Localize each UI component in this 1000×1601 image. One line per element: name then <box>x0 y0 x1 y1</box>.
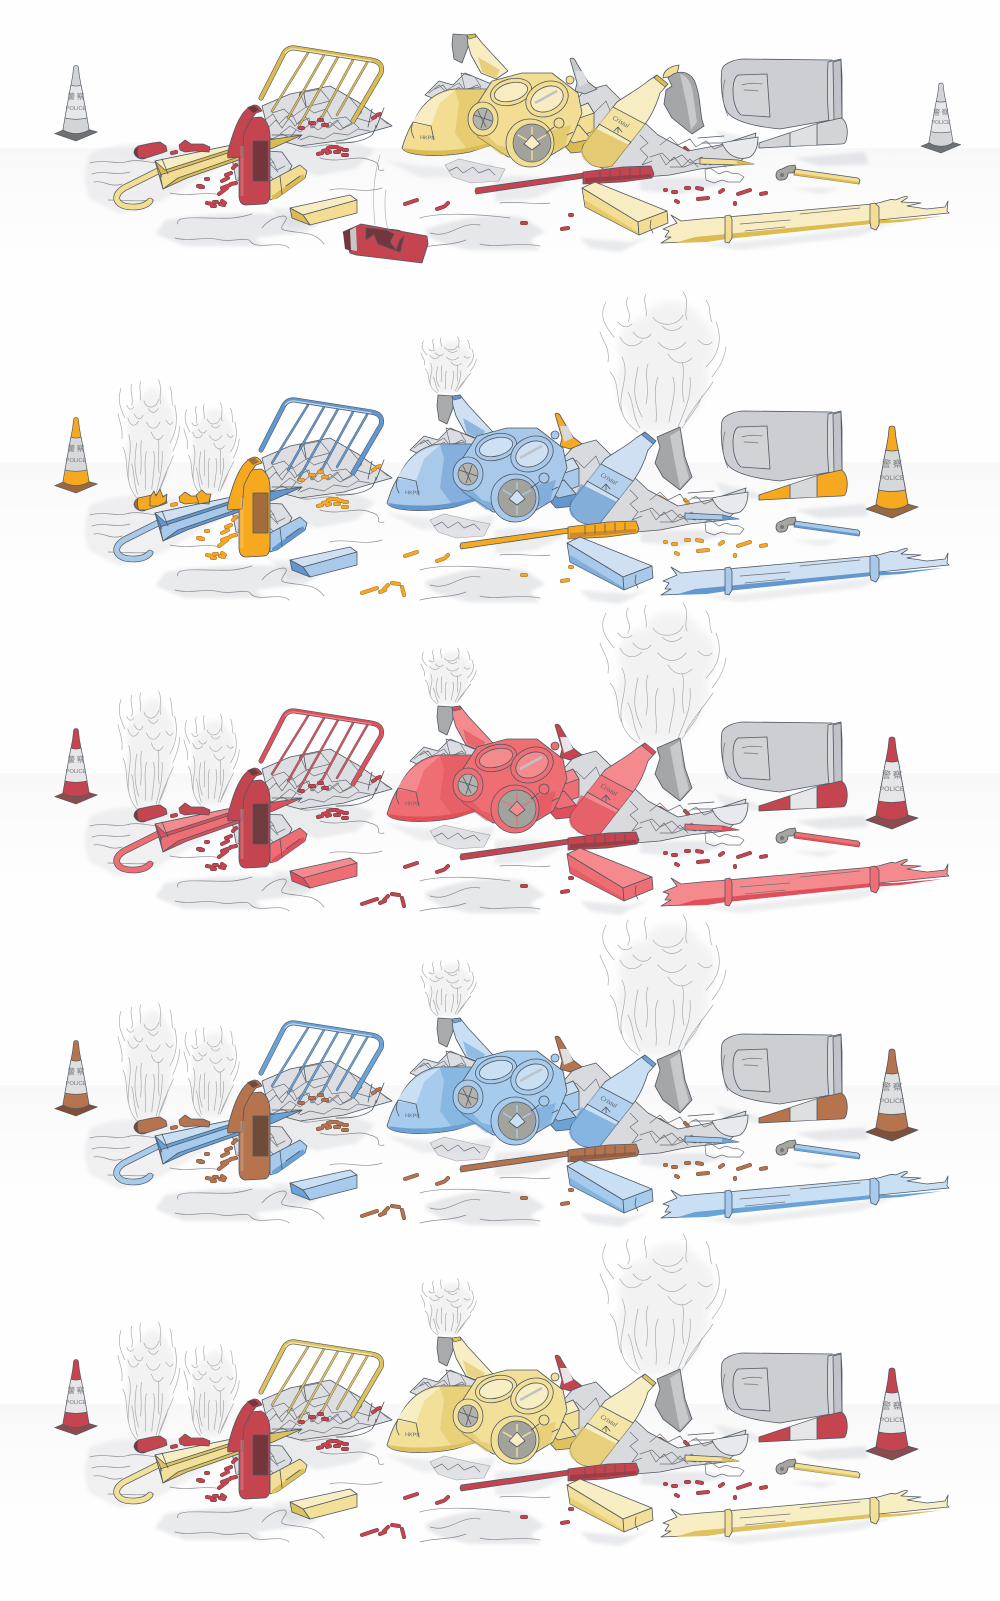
glass bottle <box>569 1374 656 1466</box>
broken stick <box>661 548 949 595</box>
gas canister <box>270 828 307 863</box>
hammer <box>776 165 860 184</box>
wheelie bin <box>721 722 842 792</box>
pen tool <box>685 824 740 831</box>
burning sticks <box>134 492 210 511</box>
pellets <box>172 466 766 595</box>
bottle rag <box>655 1369 692 1432</box>
helmet <box>402 89 492 156</box>
gas mask <box>453 739 567 833</box>
flames <box>150 489 211 506</box>
small bottle <box>437 395 493 440</box>
glass bottle <box>581 75 668 167</box>
fire extinguisher <box>228 768 270 868</box>
debris piles <box>232 86 392 184</box>
smoke plume small <box>421 337 476 393</box>
helmet <box>387 755 477 822</box>
pen tool <box>685 513 740 520</box>
broken stick <box>661 1171 949 1218</box>
floor tone <box>0 773 1000 893</box>
brick blocks <box>540 1081 579 1131</box>
pellets <box>172 114 766 243</box>
floor tone <box>0 1404 1000 1524</box>
pellets <box>172 1408 766 1537</box>
smoke plume second <box>184 1026 239 1117</box>
floor tone <box>0 462 1000 582</box>
fire extinguisher <box>228 1399 270 1499</box>
fence barrier <box>261 711 382 791</box>
debris piles <box>232 1061 392 1159</box>
panel: scene 3 red <box>0 603 1000 915</box>
broken stick <box>661 196 949 243</box>
smoke plume big <box>600 1234 726 1374</box>
bottle rag <box>655 1050 692 1113</box>
helmet <box>387 1067 477 1134</box>
bottle rag <box>655 427 692 490</box>
debris over helmet <box>410 1370 518 1480</box>
brick blocks <box>555 103 594 153</box>
fire extinguisher <box>228 105 270 205</box>
fallen cone <box>759 781 847 811</box>
brick right <box>567 537 653 590</box>
smoke plume second <box>184 714 239 805</box>
small cone grey <box>570 58 597 94</box>
left cone <box>55 729 97 804</box>
brick left <box>290 1170 357 1200</box>
crumbs <box>705 1144 744 1158</box>
smoke plume left <box>118 1003 180 1121</box>
pen tool <box>700 158 755 165</box>
panel: scene 5 yellow and red <box>0 1234 1000 1546</box>
fallen cone grey <box>759 118 847 148</box>
helmet <box>387 1386 477 1453</box>
screwdriver <box>460 832 639 860</box>
central debris <box>560 1063 748 1157</box>
floor tone <box>0 148 1000 268</box>
left cone <box>55 1041 97 1116</box>
debris over helmet <box>410 739 518 849</box>
panel: scene 4 blue and brown <box>0 915 1000 1227</box>
debris over helmet <box>410 428 518 538</box>
burning sticks <box>134 1115 210 1134</box>
central debris <box>570 85 758 179</box>
smoke plume big <box>600 603 726 743</box>
wheelie bin <box>721 1034 842 1104</box>
small bottle <box>437 706 493 751</box>
smoke plume small <box>421 960 476 1016</box>
brick blocks <box>540 1400 579 1450</box>
crumbs <box>705 520 744 535</box>
gas canister <box>270 165 307 200</box>
floor puddles and scribbles <box>85 1422 900 1546</box>
brick right <box>582 182 668 235</box>
umbrella <box>117 1110 302 1182</box>
central debris <box>560 751 748 845</box>
debris piles <box>232 749 392 847</box>
brick left <box>290 1489 357 1519</box>
fire extinguisher <box>228 1080 270 1180</box>
bottle rag long <box>663 65 704 134</box>
small cone <box>555 413 582 449</box>
floor puddles and scribbles <box>85 1103 900 1227</box>
small cone <box>555 724 582 760</box>
pen tool <box>685 1455 740 1462</box>
broken stick <box>661 859 949 906</box>
hammer <box>776 828 860 847</box>
floor puddles and scribbles <box>85 791 900 915</box>
dropped canister <box>343 155 428 263</box>
burning sticks <box>134 1434 210 1453</box>
left cone <box>55 1360 97 1435</box>
fire extinguisher <box>228 457 270 557</box>
bottle rag <box>655 738 692 801</box>
gas mask <box>453 1370 567 1464</box>
crumbs <box>705 168 744 183</box>
gas mask <box>468 73 582 167</box>
pellets <box>172 1089 766 1218</box>
brick blocks <box>540 458 579 508</box>
hammer <box>776 1459 860 1478</box>
smoke plume big <box>600 915 726 1055</box>
glass bottle <box>569 743 656 835</box>
fallen cone <box>759 1412 847 1442</box>
screwdriver <box>460 1144 639 1172</box>
gas canister <box>270 1459 307 1494</box>
wheelie bin <box>721 411 842 481</box>
wheelie bin <box>721 1353 842 1423</box>
debris over helmet <box>410 1051 518 1161</box>
right cone grey <box>921 83 961 153</box>
smoke plume left <box>118 691 180 809</box>
fallen cone <box>759 1093 847 1123</box>
small bottle <box>437 1337 493 1382</box>
screwdriver <box>460 521 639 549</box>
crumbs <box>705 832 744 846</box>
small cone <box>555 1036 582 1072</box>
small cone <box>555 1355 582 1391</box>
gas canister <box>270 1140 307 1175</box>
fence barrier <box>261 1023 382 1103</box>
pellets <box>172 777 766 906</box>
screwdriver <box>460 1463 639 1491</box>
smoke plume small <box>421 1279 476 1335</box>
floor puddles and scribbles <box>85 480 900 604</box>
panel: scene 2 blue and orange <box>0 292 1000 604</box>
burning sticks <box>134 803 210 822</box>
fence barrier <box>261 1342 382 1422</box>
spent sticks <box>134 140 210 159</box>
central debris <box>560 1382 748 1476</box>
umbrella <box>117 487 302 559</box>
brick right <box>567 1160 653 1213</box>
gas canister <box>270 517 307 552</box>
floor puddles and scribbles <box>85 128 900 252</box>
gas mask <box>453 428 567 522</box>
crumbs <box>705 1462 744 1477</box>
brick right <box>567 848 653 901</box>
smoke plume second <box>184 1345 239 1436</box>
right cone <box>866 1049 918 1141</box>
hammer <box>776 517 860 536</box>
left cone grey <box>55 66 97 141</box>
helmet <box>387 444 477 511</box>
umbrella <box>117 1429 302 1501</box>
smoke plume small <box>421 648 476 704</box>
smoke plume big <box>600 292 726 432</box>
small bottle <box>437 1018 493 1063</box>
smoke plume left <box>118 1322 180 1440</box>
debris piles <box>232 1380 392 1478</box>
glass bottle <box>569 432 656 524</box>
brick left <box>290 195 357 225</box>
broken stick <box>661 1490 949 1537</box>
right cone <box>866 426 918 518</box>
screwdriver <box>475 166 654 194</box>
smoke plume left <box>118 380 180 498</box>
debris over helmet <box>425 73 533 183</box>
floor tone <box>0 1085 1000 1205</box>
panel: scene 1 yellow and red, grey cones <box>0 34 1000 268</box>
brick blocks <box>540 769 579 819</box>
right cone <box>866 1368 918 1460</box>
fence barrier <box>261 400 382 480</box>
right cone <box>866 737 918 829</box>
smoke plume second <box>184 403 239 494</box>
left cone <box>55 418 97 493</box>
central debris <box>560 440 748 534</box>
brick right <box>567 1479 653 1532</box>
debris piles <box>232 438 392 536</box>
fence barrier <box>261 48 382 128</box>
brick left <box>290 858 357 888</box>
wheelie bin <box>721 59 842 129</box>
glass bottle <box>569 1055 656 1147</box>
brick left <box>290 547 357 577</box>
gas mask <box>453 1051 567 1145</box>
pen tool <box>685 1136 740 1143</box>
fallen cone <box>759 470 847 500</box>
hammer <box>776 1140 860 1159</box>
umbrella <box>117 135 302 207</box>
small bottle <box>452 34 508 79</box>
umbrella <box>117 798 302 870</box>
